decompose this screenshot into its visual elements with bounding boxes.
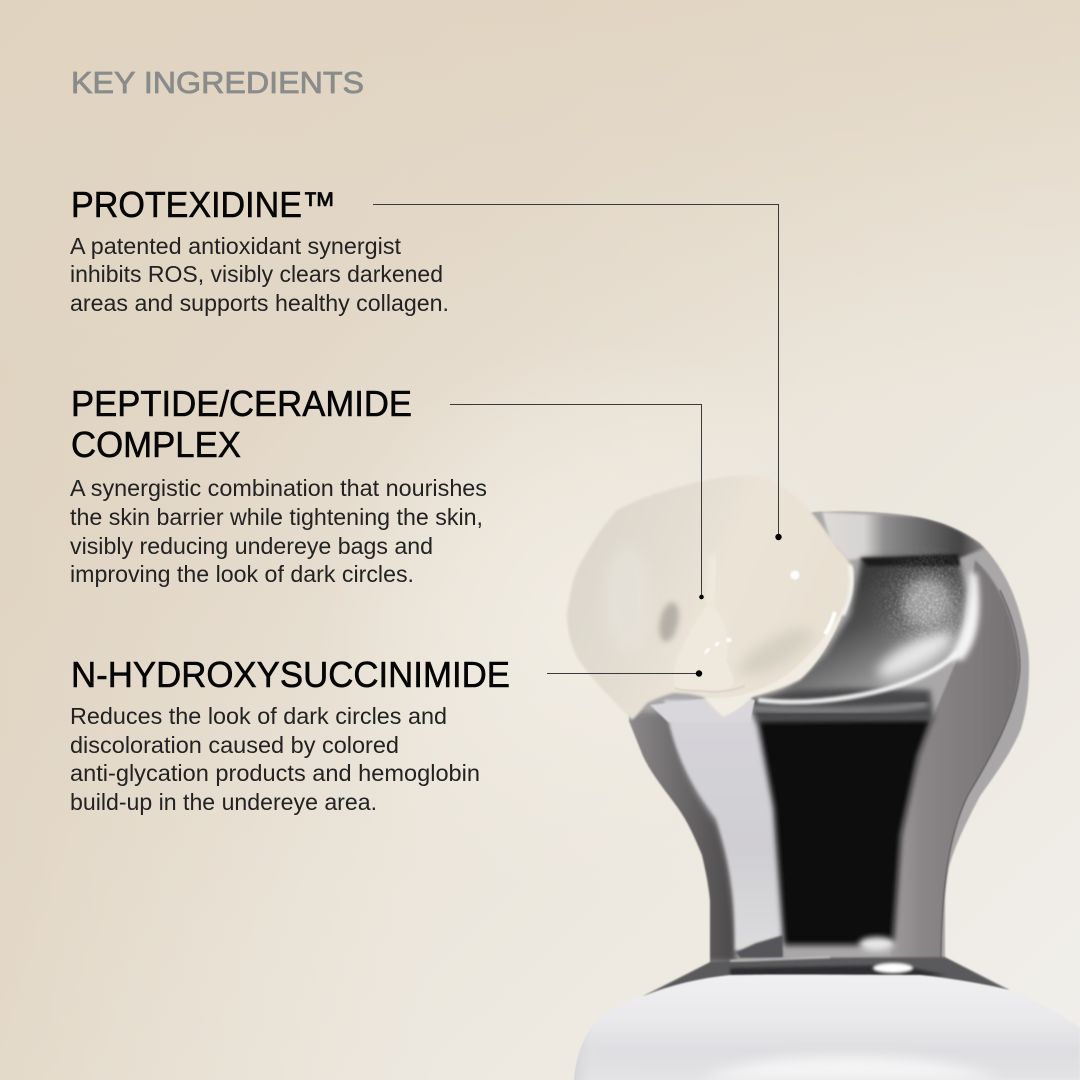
white bottle cap [574, 975, 1080, 1080]
description: anti-glycation products and hemoglobin [70, 760, 480, 786]
description [70, 703, 480, 815]
bright arc highlight [758, 652, 958, 702]
sparkle patch [903, 577, 951, 629]
cream highlights [790, 570, 800, 580]
ingredient: Protexidine [70, 184, 449, 316]
right gray surface [890, 560, 1019, 958]
collar [640, 957, 1012, 998]
description: A synergistic combination that nourishes [70, 475, 487, 501]
title: KEY INGREDIENTS [71, 65, 364, 100]
description [70, 475, 487, 587]
description: the skin barrier while tightening the skin, [70, 504, 483, 530]
cream lower shade [735, 629, 815, 675]
heading [71, 383, 412, 465]
cream fold ridge [707, 555, 714, 605]
top crest [822, 512, 985, 560]
rim contour line [941, 590, 1020, 958]
description: inhibits ROS, visibly clears darkened [70, 261, 443, 287]
ingredient: N-Hydroxysuccinimide [70, 654, 510, 815]
metal applicator tip [625, 511, 1029, 998]
callout line: N-Hydroxysuccinimide [547, 670, 702, 677]
heading: PEPTIDE/CERAMIDE [71, 383, 412, 424]
description [70, 233, 449, 316]
callout line: Peptide/Ceramide Complex [450, 404, 704, 599]
ingredient: Peptide/Ceramide Complex [70, 383, 487, 587]
description: discoloration caused by colored [70, 732, 399, 758]
cream droplet [673, 606, 733, 691]
brushed highlight glow [872, 624, 958, 686]
cream lower lip, lighter [706, 604, 846, 716]
upper brushed surface [760, 556, 966, 706]
product photo: metal applicator with cream [567, 476, 1080, 1080]
description: visibly reducing undereye bags and [70, 533, 433, 559]
description: Reduces the look of dark circles and [70, 703, 447, 729]
heading: PROTEXIDINE™ [71, 184, 336, 225]
pale lavender reflection [664, 700, 784, 950]
metal pale area under cream [650, 695, 755, 722]
cream dollop [567, 476, 853, 720]
cream left lobe sheen [604, 545, 652, 655]
heading: N-HYDROXYSUCCINIMIDE [71, 654, 510, 695]
left outer band [625, 712, 736, 962]
description: A patented antioxidant synergist [70, 233, 401, 259]
description: build-up in the undereye area. [70, 789, 377, 815]
description: improving the look of dark circles. [70, 561, 414, 587]
callout line: Protexidine [373, 204, 782, 540]
neck highlight [859, 937, 895, 951]
heading: COMPLEX [71, 424, 241, 465]
gray brushed band above black [745, 688, 934, 722]
cream fold shadow [656, 601, 682, 643]
bright vertical band [948, 572, 979, 660]
black centre reflection [757, 718, 932, 945]
description: areas and supports healthy collagen. [70, 290, 449, 316]
